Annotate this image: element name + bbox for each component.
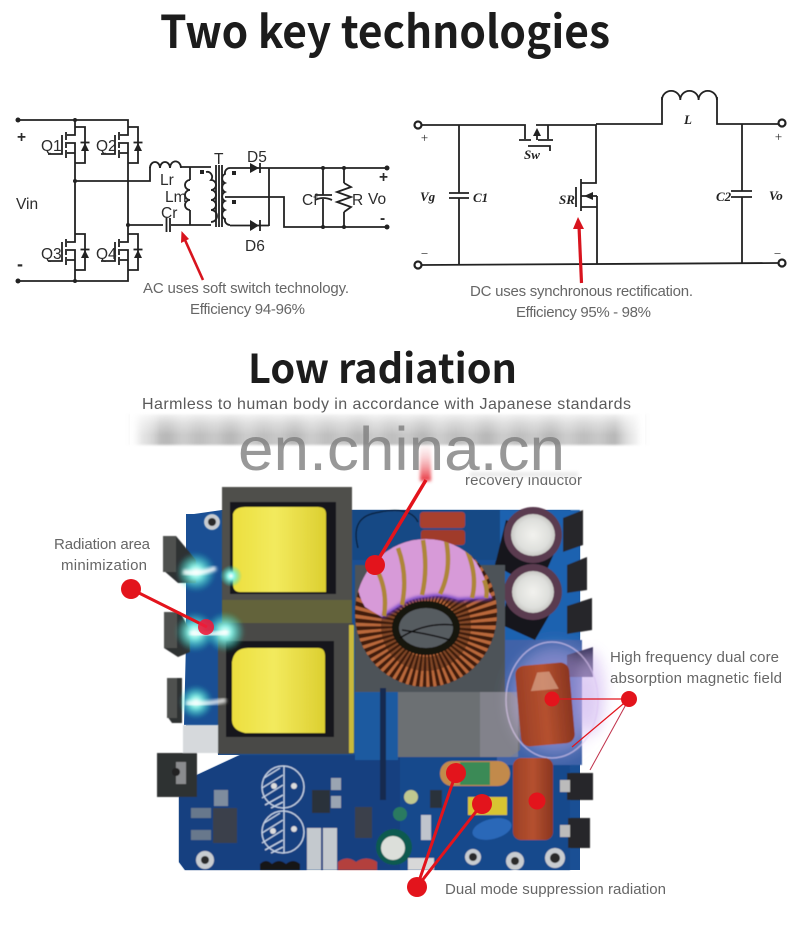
- circuit labels: C2: [716, 189, 732, 204]
- electrolytic capacitors: top right: [495, 507, 562, 640]
- yellow and blue capacitors: [468, 797, 514, 844]
- pin header column: [380, 688, 386, 800]
- purple magnetic field glow: [503, 638, 607, 762]
- circuit labels: Cr: [161, 205, 177, 222]
- circuit labels: C1: [473, 190, 488, 205]
- circuit labels: Vo: [368, 191, 386, 208]
- label: high frequency dual core: High frequency dual core: [610, 649, 779, 666]
- label: radiation area minimization: [54, 536, 151, 574]
- mounting holes: [196, 514, 565, 870]
- arrow: DC pointer: [573, 217, 584, 283]
- fade over the label top: [455, 450, 590, 477]
- bottom connectors and caps: [260, 790, 434, 870]
- arrow: AC pointer: [181, 231, 203, 280]
- transformer: bottom: [218, 623, 354, 754]
- circuit labels: Q3: [41, 246, 62, 263]
- circuit labels: R: [352, 192, 363, 209]
- circuit labels: +: [17, 129, 26, 146]
- pcb photo: [157, 487, 607, 870]
- blurred band behind watermark: [130, 411, 645, 451]
- red capacitor: large: [515, 662, 575, 747]
- caption: AC soft switch: AC uses soft switch technology.: [143, 280, 349, 297]
- circuit labels: Q4: [96, 246, 117, 263]
- circuit labels: D6: [245, 238, 265, 255]
- circuit labels: -: [17, 254, 23, 274]
- heading: Low radiation: Low radiation: [248, 337, 517, 395]
- callout: dual mode suppression marker: [407, 763, 492, 897]
- transistors: right: [563, 510, 593, 848]
- white fuses: [307, 828, 337, 870]
- circuit labels: T: [214, 151, 224, 168]
- circuit labels: Lr: [160, 172, 174, 189]
- callout: high frequency dual core marker: [528, 691, 637, 810]
- circuit labels: Vo: [769, 188, 783, 203]
- circuit labels: [16, 129, 388, 274]
- circuit: AC soft switch full bridge: [16, 118, 390, 284]
- board: [179, 510, 580, 870]
- circuit labels: Vg: [420, 189, 436, 204]
- red capacitor: lower: [513, 758, 553, 840]
- label: radiation area minimization: Radiation area: [54, 536, 151, 553]
- toroid background plate: [355, 565, 505, 692]
- sparks: cyan discharge: [175, 552, 245, 719]
- silver pad: [183, 725, 218, 753]
- callout: recovery inductor marker: [365, 445, 431, 575]
- label: high frequency dual core: [610, 649, 782, 687]
- transformer: top: [222, 487, 352, 623]
- label: high frequency dual core: absorption magnetic field: [610, 670, 782, 687]
- label: dual mode suppression radiation: Dual mode suppression radiation: [445, 881, 666, 898]
- circuit labels: [420, 112, 783, 261]
- circuit labels: Vin: [16, 196, 38, 213]
- circuit labels: Lm: [165, 189, 187, 206]
- circuit labels: D5: [247, 149, 267, 166]
- grey shield box: [398, 692, 520, 757]
- circuit labels: −: [420, 246, 429, 261]
- circuit labels: Q2: [96, 138, 117, 155]
- caption: DC synchronous rectification: Efficiency 95% - 98%: [516, 304, 651, 321]
- subtitle: Harmless to human body: Harmless to human body in accordance with Japanese standards: [142, 396, 631, 413]
- circuit labels: +: [774, 129, 783, 144]
- green common mode inductor: [440, 761, 510, 786]
- circuit labels: Sw: [524, 147, 540, 162]
- circuit labels: Cf: [302, 192, 318, 209]
- circuit labels: Q1: [41, 138, 62, 155]
- circuit labels: -: [380, 210, 385, 227]
- circuit: DC synchronous rectification: [414, 91, 786, 268]
- watermark: en.china.cn: en.china.cn: [238, 415, 565, 483]
- component: small red capacitor: [420, 512, 465, 545]
- caption: DC synchronous rectification: [470, 283, 693, 321]
- hatched footprints: [262, 766, 304, 853]
- caption: AC soft switch: [143, 280, 349, 318]
- caption: AC soft switch: Efficiency 94-96%: [190, 301, 305, 318]
- circuit labels: +: [420, 130, 429, 145]
- toroidal inductor: [355, 537, 497, 687]
- circuit labels: L: [683, 112, 692, 127]
- callout: radiation area minimization marker: [121, 579, 214, 635]
- caption: DC synchronous rectification: DC uses synchronous rectification.: [470, 283, 693, 300]
- circuit labels: SR: [559, 192, 575, 207]
- label: radiation area minimization: minimization: [61, 557, 147, 574]
- transistors: left: [157, 536, 197, 797]
- label: recovery inductor: recovery inductor: [465, 472, 582, 489]
- circuit labels: +: [379, 169, 388, 186]
- wire loop: [356, 510, 418, 548]
- ICs and SMD parts: [191, 778, 442, 843]
- circuit labels: −: [773, 246, 782, 261]
